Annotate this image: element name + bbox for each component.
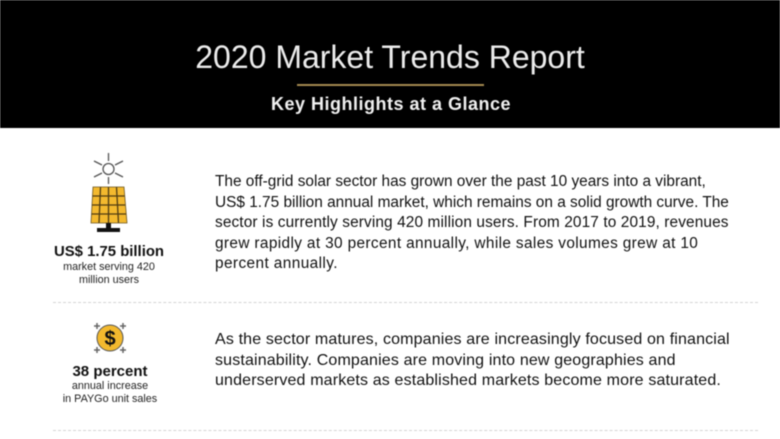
title: 2020 Market Trends Report — [195, 39, 585, 75]
icon: solar panel with sun — [90, 152, 128, 233]
icon: dollar coin: $ — [104, 328, 116, 350]
text block: sector overview: percent annually. — [215, 255, 338, 272]
text block: financial sustainability: sustainability. Companies are moving into new geographies and — [215, 352, 676, 368]
stat description: annual increase — [72, 380, 148, 392]
stat: market size — [54, 244, 164, 286]
stat value: US$ 1.75 billion — [54, 244, 164, 260]
text block: sector overview: The off-grid solar sector has grown over the past 10 years into a vibrant, — [215, 173, 706, 190]
gold rule — [297, 84, 484, 86]
header band — [0, 0, 780, 128]
stat value: 38 percent — [72, 363, 148, 380]
text block: sector overview: US$ 1.75 billion annual market, which remains on a solid growth curve. The — [215, 194, 729, 210]
text block: sector overview: sector is currently serving 420 million users. From 2017 to 2019, revenues — [215, 214, 729, 231]
text block: financial sustainability — [214, 331, 730, 389]
stat description: market serving 420 — [63, 261, 155, 273]
text block: sector overview — [214, 173, 729, 272]
stat: PAYGo sales — [62, 363, 158, 405]
subtitle: Key Highlights at a Glance — [271, 94, 511, 114]
text block: sector overview: grew rapidly at 30 percent annually, while sales volumes grew at 10 — [215, 234, 698, 252]
text block: financial sustainability: As the sector matures, companies are increasingly focused on financial — [215, 331, 730, 348]
text block: financial sustainability: underserved markets as established markets become more saturated. — [215, 372, 721, 389]
stat description: million users — [79, 274, 139, 286]
stat description: in PAYGo unit sales — [63, 393, 157, 405]
stat description — [62, 380, 158, 405]
icon: dollar coin — [93, 322, 127, 354]
stat description — [63, 261, 156, 286]
